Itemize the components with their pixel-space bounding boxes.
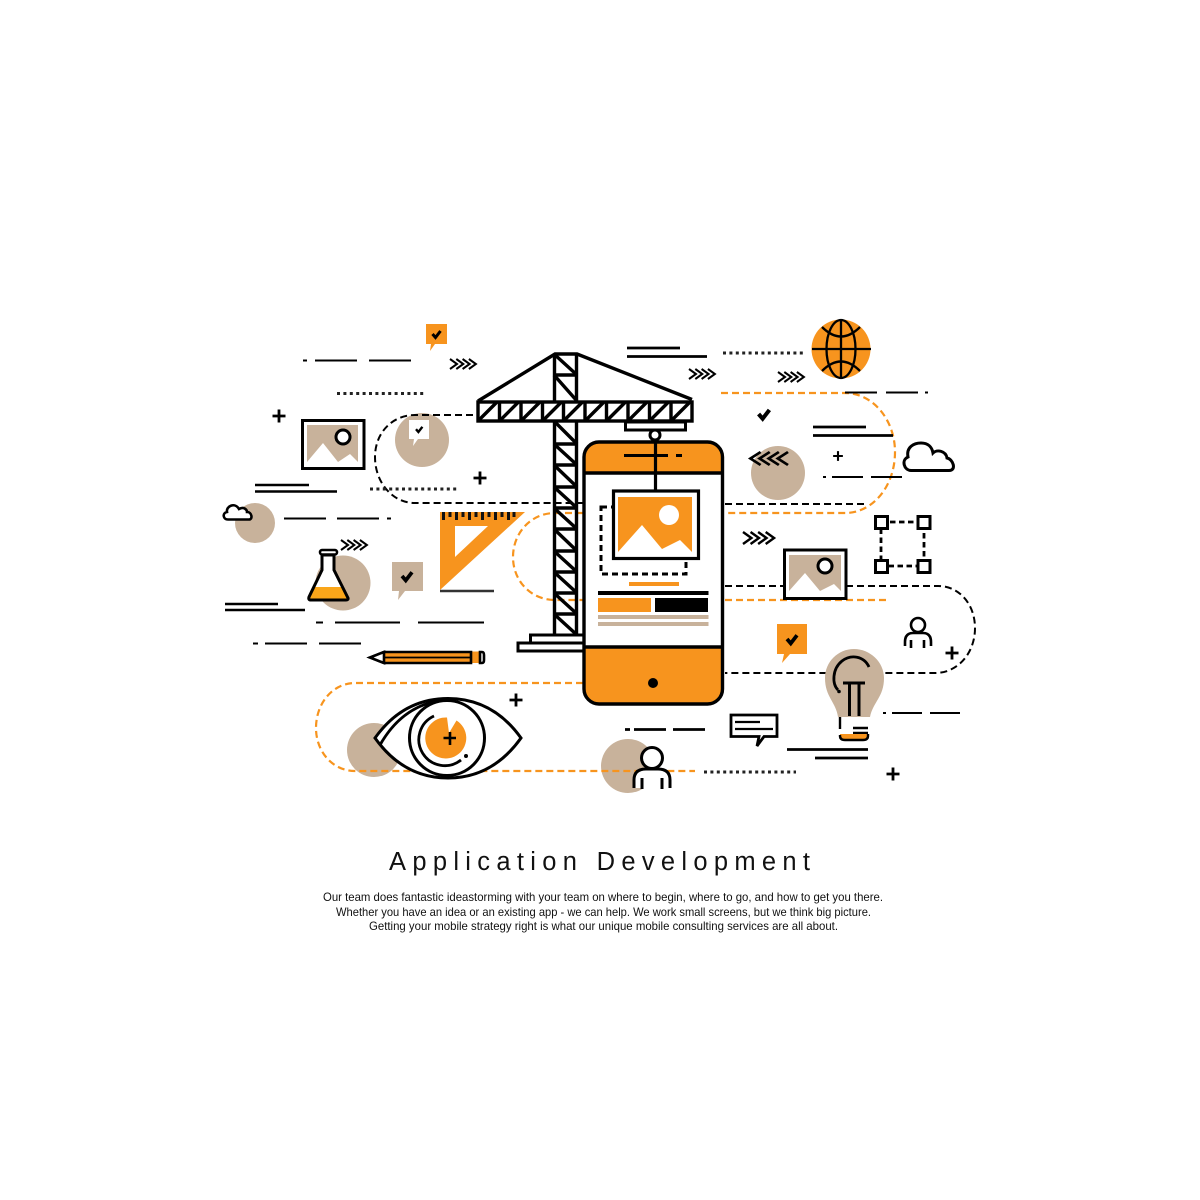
orange dashed route centre loop	[513, 513, 890, 600]
icon: tan speech bubble	[392, 562, 423, 600]
plus signs	[272, 410, 958, 780]
dotted lines	[337, 353, 805, 772]
icon: person right	[905, 618, 931, 648]
phone top band	[584, 442, 722, 473]
crane cab	[626, 422, 686, 430]
dashed placeholder	[601, 507, 686, 574]
icon: pencil	[370, 652, 484, 663]
phone	[584, 442, 722, 704]
content bars	[598, 582, 708, 626]
description text	[323, 890, 883, 933]
description text: Our team does fantastic ideastorming with your team on where to begin, where to go, and how to get you there.	[323, 890, 883, 904]
tan background circles	[235, 413, 805, 793]
phone speaker	[624, 454, 682, 457]
crane base	[518, 635, 584, 651]
icon: set square ruler	[440, 512, 525, 591]
icon: message bubble	[731, 715, 777, 746]
black dashed route right loop	[725, 586, 975, 673]
icon: white speech bubble on tan circle	[409, 420, 429, 446]
icon: eye	[375, 698, 521, 778]
phone bottom band	[584, 647, 722, 704]
icon: picture frame left	[302, 420, 364, 468]
icon: person bottom	[634, 748, 670, 789]
orange dashed route bottom loop	[316, 683, 695, 771]
decorative lines right	[625, 348, 960, 758]
black dashed route upper left	[375, 415, 864, 504]
icon: cloud left	[224, 505, 251, 520]
chevron arrows	[341, 359, 804, 550]
icon: cloud right	[904, 443, 953, 470]
icon: picture frame right	[784, 550, 846, 598]
orange dashed route right loop	[721, 393, 895, 513]
decorative lines left	[225, 360, 484, 644]
icon: orange speech bubble right	[777, 624, 807, 663]
hanging picture	[614, 491, 698, 558]
description text: Whether you have an idea or an existing app - we can help. We work small screens, but we think big picture.	[336, 905, 871, 919]
icon: light bulb	[825, 649, 884, 740]
icon: selection square	[876, 516, 930, 572]
description text: Getting your mobile strategy right is what our unique mobile consulting services are all about.	[369, 919, 838, 933]
icon: globe	[812, 320, 871, 378]
icon: flask	[309, 550, 348, 600]
crane hook and cable	[650, 430, 660, 491]
crane tower	[478, 354, 692, 635]
crane mast	[554, 354, 577, 635]
crane boom	[478, 402, 692, 421]
title: Application Development	[389, 848, 810, 876]
icon: orange speech bubble top	[426, 324, 447, 351]
phone home button	[648, 678, 658, 688]
icon: check mark	[759, 410, 769, 419]
